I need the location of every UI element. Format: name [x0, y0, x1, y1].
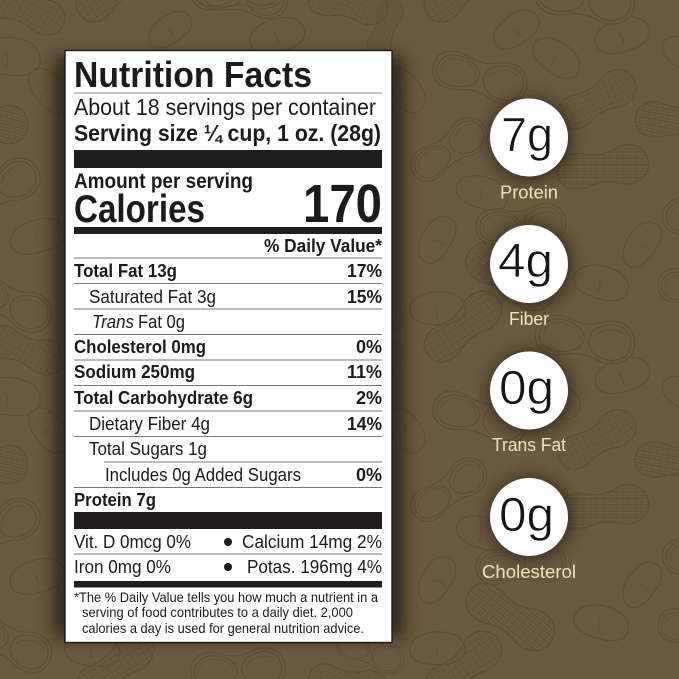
footnote: serving of food contributes to a daily diet. 2,000: [82, 604, 353, 620]
callout: 4g fiber: [487, 222, 573, 329]
callout: 0g cholesterol: Cholesterol: [482, 562, 576, 582]
callout: 0g cholesterol: 0g: [499, 489, 554, 542]
callout: 7g protein: [487, 96, 573, 202]
row: vitamin D and calcium: Calcium 14mg 2%: [242, 532, 382, 552]
callout: 4g fiber: Fiber: [509, 309, 549, 329]
row: sodium: [74, 362, 382, 382]
row: protein: Protein 7g: [74, 490, 156, 510]
row: iron and potassium: [74, 557, 382, 577]
row: vitamin D and calcium: [74, 532, 382, 552]
row: saturated fat: [89, 287, 382, 307]
heading: Nutrition Facts: Nutrition Facts: [74, 54, 312, 95]
serving size: Serving size ¼ cup, 1 oz. (28g): [74, 120, 381, 146]
row: added sugars: 0%: [356, 465, 382, 485]
callout: 7g protein: 7g: [501, 109, 553, 162]
row: total carbohydrate: [74, 388, 382, 408]
row: sodium: Sodium 250mg: [74, 362, 195, 382]
row: saturated fat: 15%: [347, 287, 382, 307]
servings per container: About 18 servings per container: [74, 94, 376, 120]
footnote: [74, 589, 378, 636]
row: added sugars: Includes 0g Added Sugars: [105, 465, 301, 485]
row: iron and potassium: Potas. 196mg 4%: [247, 557, 382, 577]
callout: 0g cholesterol: [482, 475, 576, 582]
callout: 0g trans fat: [487, 349, 573, 455]
row: dietary fiber: Dietary Fiber 4g: [89, 414, 210, 434]
calories value: 170: [303, 174, 382, 234]
row: saturated fat: Saturated Fat 3g: [89, 287, 216, 307]
row: vitamin D and calcium: Vit. D 0mcg 0%: [74, 532, 191, 552]
daily value heading: % Daily Value*: [264, 236, 382, 256]
row: cholesterol: [74, 337, 382, 357]
row: trans fat: [92, 312, 185, 332]
callout: 0g trans fat: 0g: [499, 362, 554, 415]
panel shadow: [54, 56, 404, 638]
callout: 7g protein: Protein: [500, 182, 558, 202]
amount per serving: Amount per serving: [74, 169, 253, 193]
row: total fat: 17%: [347, 261, 382, 281]
row: sodium: 11%: [347, 362, 382, 382]
row: total fat: [74, 261, 382, 281]
calories label: Calories: [74, 188, 205, 231]
row: dietary fiber: [89, 414, 382, 434]
row: cholesterol: 0%: [356, 337, 382, 357]
row: cholesterol: Cholesterol 0mg: [74, 337, 206, 357]
footnote: *The % Daily Value tells you how much a nutrient in a: [74, 589, 378, 605]
callout: 4g fiber: 4g: [498, 235, 553, 288]
callout: 0g trans fat: Trans Fat: [492, 435, 566, 455]
row: trans fat: Trans: [92, 312, 134, 332]
row: iron and potassium: Iron 0mg 0%: [74, 557, 171, 577]
row: dietary fiber: 14%: [347, 414, 382, 434]
row: total sugars: Total Sugars 1g: [89, 439, 207, 459]
row: total fat: Total Fat 13g: [74, 261, 177, 281]
panel: nutrition facts label: [65, 50, 392, 642]
row: total carbohydrate: 2%: [356, 388, 382, 408]
row: trans fat: Fat 0g: [138, 312, 185, 332]
footnote: calories a day is used for general nutrition advice.: [82, 620, 364, 636]
row: total carbohydrate: Total Carbohydrate 6g: [74, 388, 253, 408]
